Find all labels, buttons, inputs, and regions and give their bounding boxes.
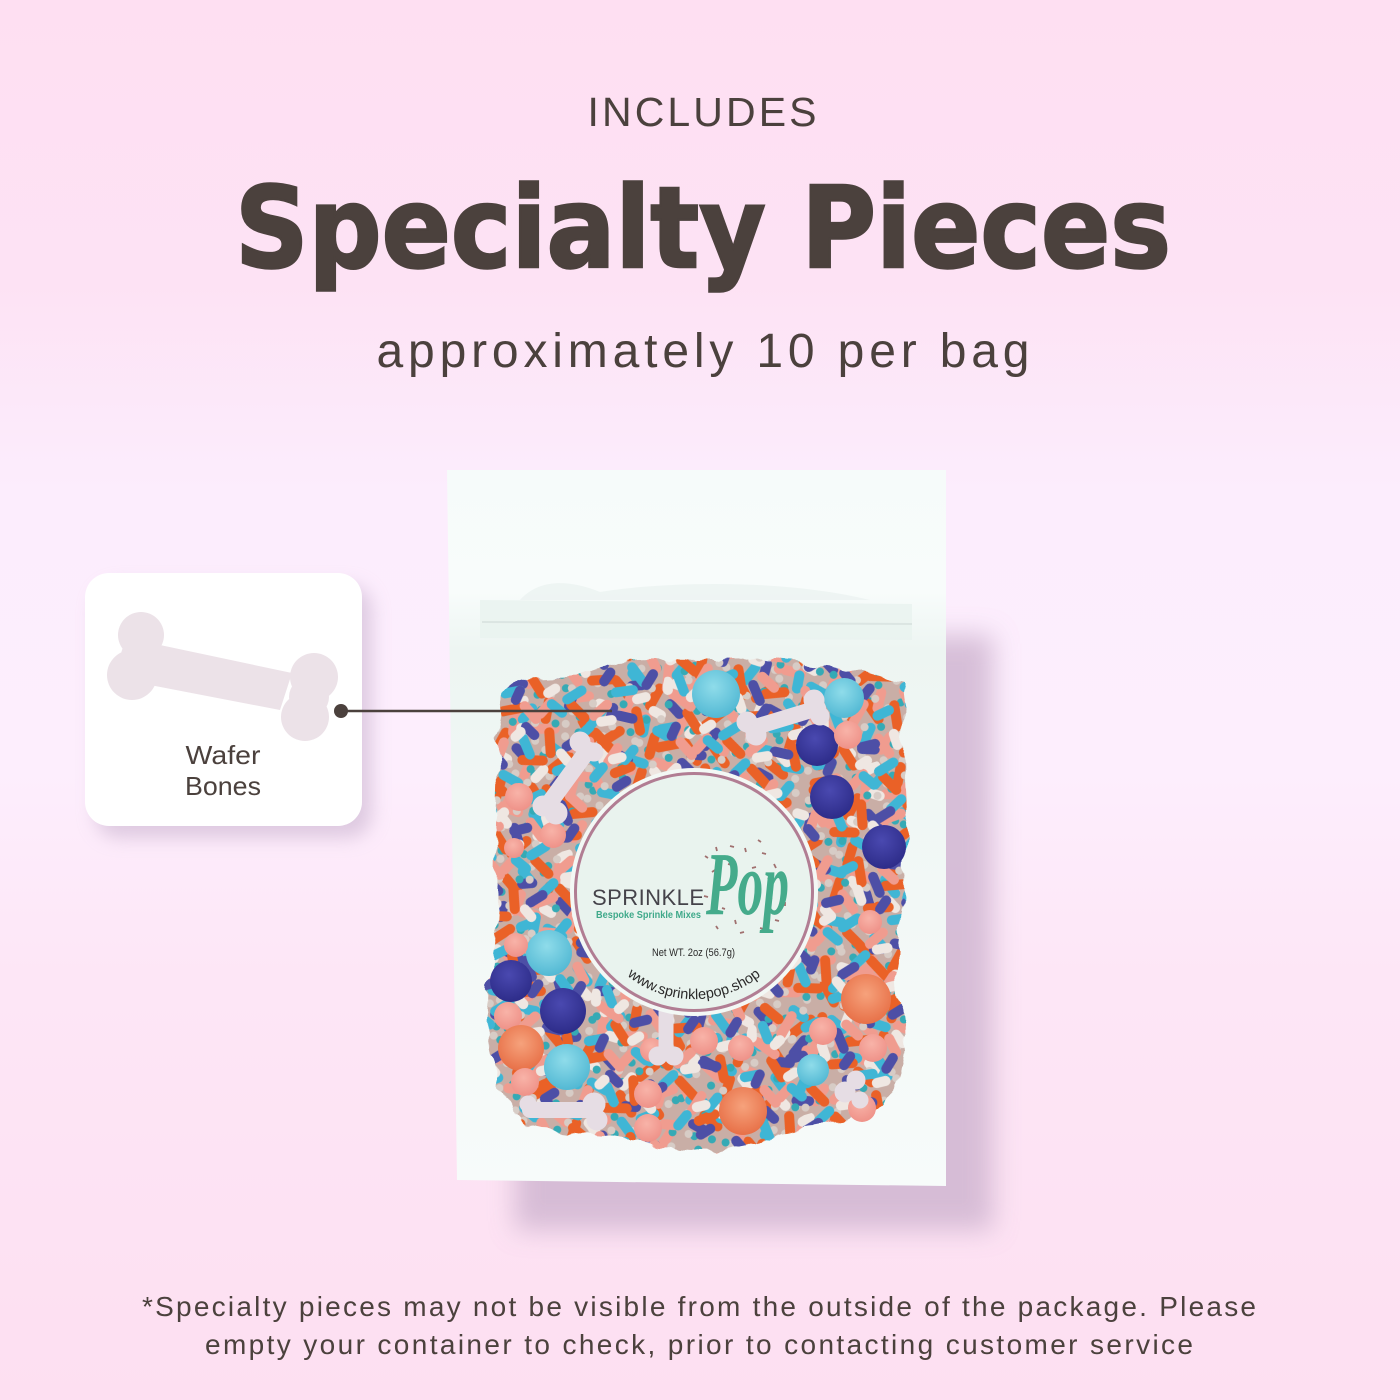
footnote [142,1291,1256,1360]
label confetti [704,840,785,933]
heading: includes: INCLUDES [588,89,816,135]
callout card [85,573,362,826]
subtitle: approximately 10 per bag [376,325,1030,378]
label: wafer bones: Bones [185,771,261,801]
wafer bones in bag [520,690,868,1130]
large beads [490,670,906,1142]
footnote: *Specialty pieces may not be visible from the outside of the package. Please [142,1291,1256,1322]
sprinkle mix [484,658,910,1154]
website: www.sprinklepop.shop [628,970,760,1002]
net weight: Net WT. 2oz (56.7g) [652,947,735,959]
bag shadow [515,635,993,1230]
wafer bone [107,612,338,741]
product bag [447,470,946,1186]
label: wafer bones [185,740,261,801]
footnote: empty your container to check, prior to contacting customer service [205,1329,1193,1360]
brand script: Pop [705,835,789,934]
brand word: SPRINKLE [592,885,704,910]
label: wafer bones: Wafer [186,740,261,770]
bag label [570,768,818,1016]
pointer line [334,704,612,718]
brand tagline: Bespoke Sprinkle Mixes [596,909,701,921]
callout card shadow [95,585,372,838]
title: Specialty Pieces [235,164,1171,294]
